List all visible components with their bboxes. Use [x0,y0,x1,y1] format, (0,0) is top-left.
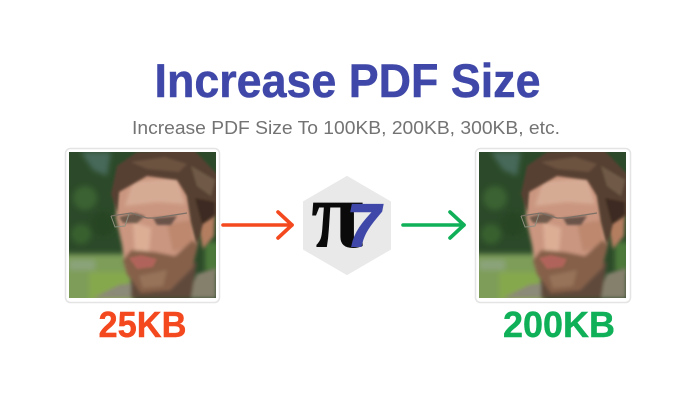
title: Increase PDF Size [154,54,540,107]
icon: pi7 logo: π [311,161,364,268]
label: increased size: 200KB [503,304,615,345]
arrow: red [223,212,292,238]
subtitle: Increase PDF Size To 100KB, 200KB, 300KB, etc. [132,117,560,138]
panel: original photo [64,148,220,304]
arrow: green [403,212,464,238]
panel: enlarged photo [474,148,630,304]
icon: pi7 logo [304,161,390,274]
icon: pi7 logo: 7 [347,192,383,259]
label: original size: 25KB [98,304,186,345]
